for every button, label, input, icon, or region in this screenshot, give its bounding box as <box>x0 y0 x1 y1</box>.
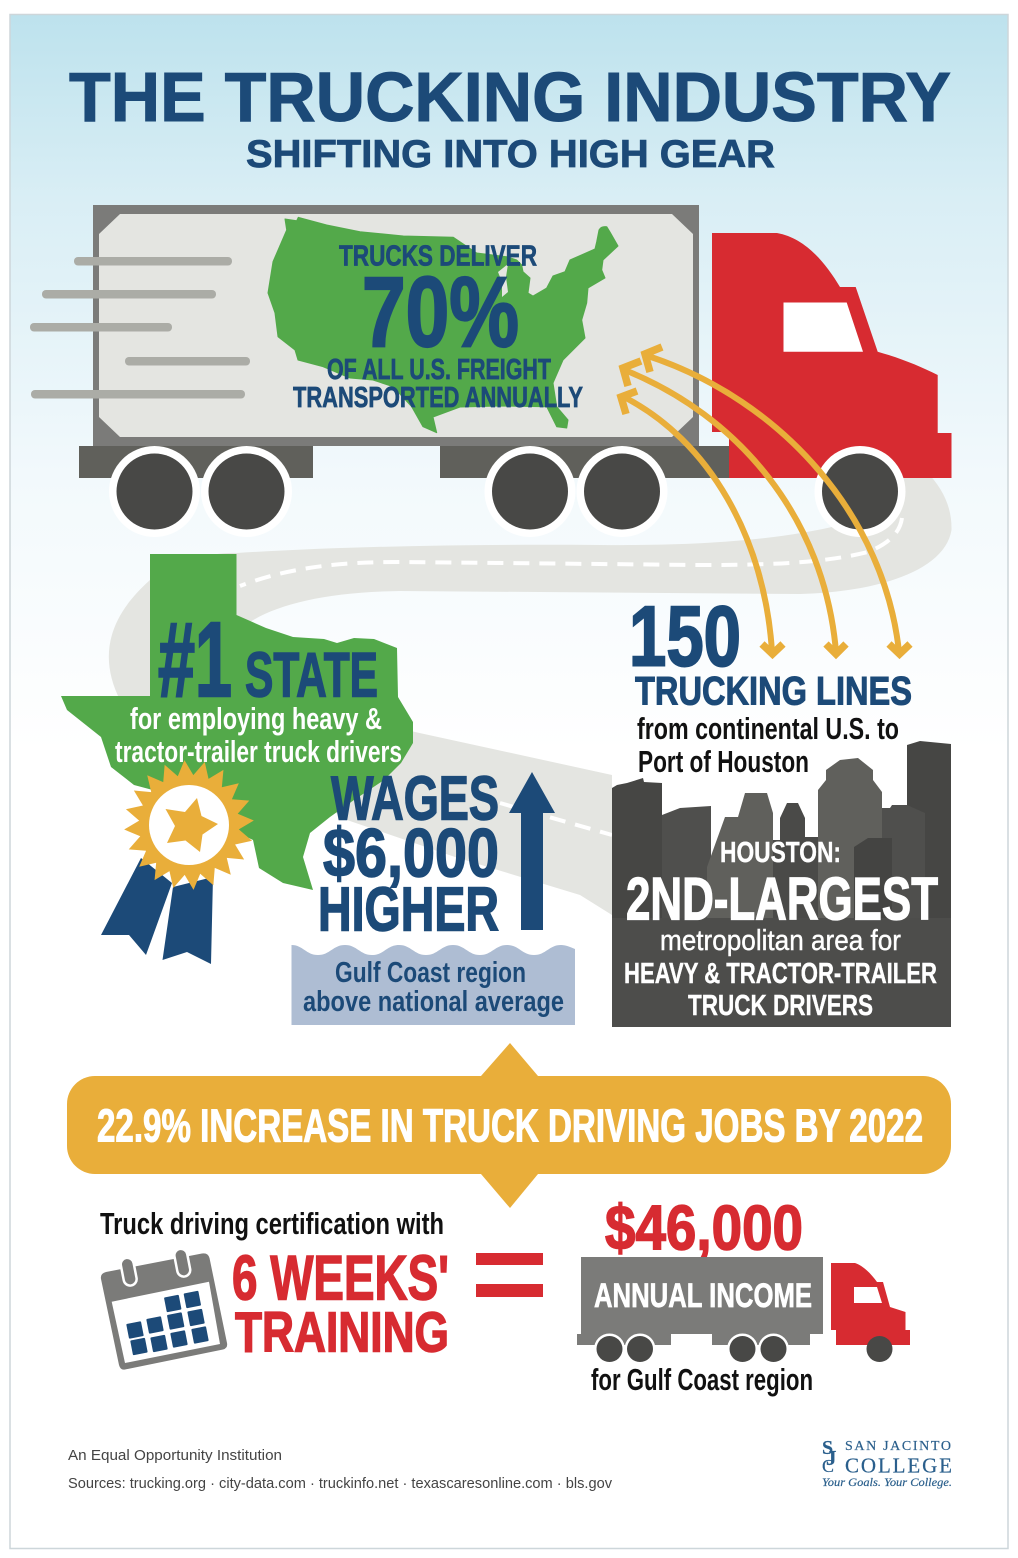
footer: notes: Sources: trucking.org · city-data.com · truckinfo.net · texascaresonline.com · bls.gov <box>68 1476 613 1492</box>
cab window <box>784 302 863 352</box>
title <box>69 58 951 176</box>
logo: san jacinto college <box>822 1437 952 1489</box>
text: 6 weeks training: TRAINING <box>235 1300 449 1364</box>
logo: san jacinto college: C <box>822 1456 834 1476</box>
text: trucks deliver 70% <box>293 240 583 414</box>
text: houston 2nd-largest <box>624 837 938 1022</box>
title: THE TRUCKING INDUSTRY <box>69 58 951 136</box>
text: trucks deliver 70%: OF ALL U.S. FREIGHT <box>327 354 551 386</box>
logo: san jacinto college: COLLEGE <box>845 1454 952 1478</box>
ribbons <box>101 858 213 964</box>
text: houston 2nd-largest: metropolitan area for <box>660 925 901 957</box>
icon: calendar <box>101 1248 227 1370</box>
speed lines <box>30 257 250 398</box>
text: trucks deliver 70%: TRUCKS DELIVER <box>339 240 537 272</box>
text: houston 2nd-largest: TRUCK DRIVERS <box>688 990 873 1022</box>
text: #1 state: STATE <box>245 640 378 710</box>
text: #1 state <box>115 601 402 769</box>
text: 150 trucking lines <box>629 590 912 779</box>
text: #1 state: tractor-trailer truck drivers <box>115 734 402 769</box>
map: United States <box>268 217 618 433</box>
text: houston 2nd-largest: HOUSTON: <box>720 837 841 869</box>
trailer panel <box>99 214 693 437</box>
text: 6 weeks training <box>232 1244 449 1364</box>
logo: san jacinto college: Your Goals. Your College. <box>822 1475 952 1489</box>
truck <box>30 205 952 537</box>
text: 150 trucking lines: TRUCKING LINES <box>635 670 912 714</box>
road <box>109 470 952 915</box>
arrow: wages up <box>509 772 555 930</box>
wave box: gulf coast: above national average <box>303 986 564 1018</box>
mini truck: ANNUAL INCOME <box>594 1277 812 1315</box>
cab <box>712 233 952 478</box>
trailer body <box>93 205 699 446</box>
text: trucks deliver 70%: 70% <box>362 256 519 367</box>
text: wages $6,000 higher: $6,000 <box>323 814 499 892</box>
wheels <box>109 446 906 537</box>
logo: san jacinto college: SAN JACINTO <box>845 1439 951 1454</box>
houston skyline <box>612 741 951 1027</box>
title: SHIFTING INTO HIGH GEAR <box>246 133 775 176</box>
footer: notes <box>68 1448 613 1492</box>
text: $46,000: $46,000 <box>605 1194 803 1264</box>
text: #1 state: for employing heavy & <box>130 701 382 736</box>
mini truck <box>577 1257 910 1364</box>
logo: san jacinto college: S <box>822 1437 833 1459</box>
text: #1 state: #1 <box>158 601 232 719</box>
text: wages $6,000 higher <box>318 764 499 944</box>
burst <box>120 756 258 894</box>
text: 150 trucking lines: Port of Houston <box>638 744 809 779</box>
award seal <box>101 756 258 964</box>
text: certification: Truck driving certification with <box>100 1206 444 1241</box>
equals sign <box>476 1253 543 1297</box>
text: wages $6,000 higher: WAGES <box>331 764 499 834</box>
text: wages $6,000 higher: HIGHER <box>318 876 499 944</box>
text: 150 trucking lines: 150 <box>629 590 741 684</box>
arrows: trucking lines to port <box>621 347 910 654</box>
footer: notes: An Equal Opportunity Institution <box>68 1448 282 1464</box>
banner: job increase <box>67 1043 951 1208</box>
text: gulf coast region: for Gulf Coast region <box>591 1362 813 1397</box>
texas state shape <box>61 554 413 890</box>
wave box: gulf coast <box>292 945 575 1025</box>
text: 6 weeks training: 6 WEEKS' <box>232 1244 449 1314</box>
text: trucks deliver 70%: TRANSPORTED ANNUALLY <box>293 382 583 414</box>
star <box>166 798 218 852</box>
wave box: gulf coast: Gulf Coast region <box>335 957 526 989</box>
text: 150 trucking lines: from continental U.S. to <box>637 711 899 746</box>
logo: san jacinto college: J <box>826 1446 836 1470</box>
chassis <box>79 446 735 478</box>
lake michigan <box>498 264 508 297</box>
